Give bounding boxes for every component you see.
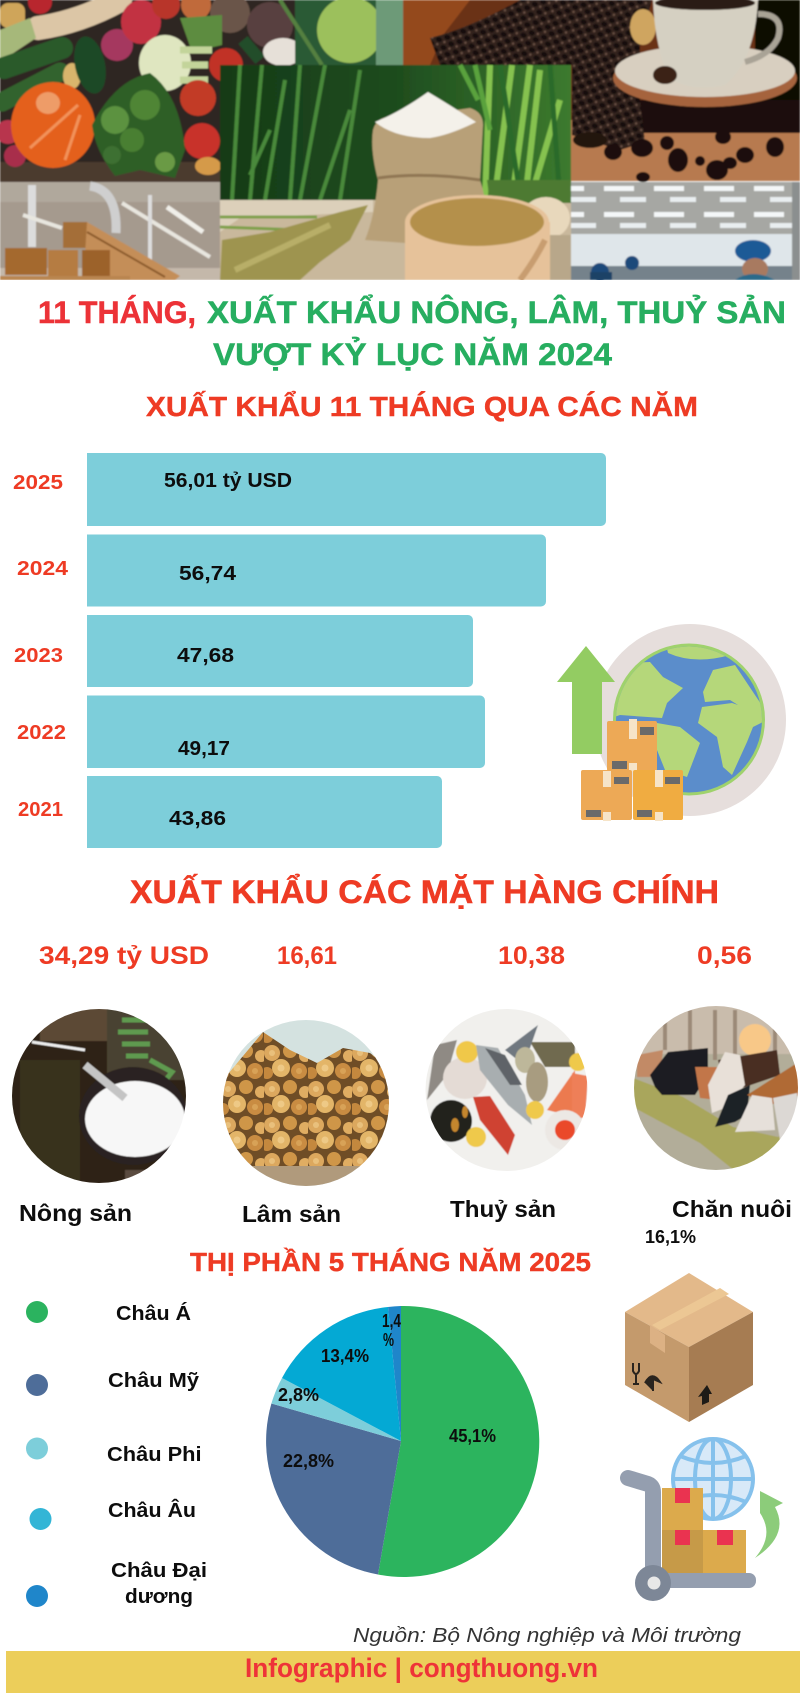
legend: Oceania: Châu Đại <box>111 1560 207 1582</box>
photo: lumber warehouse <box>0 182 220 280</box>
pie value labels: % <box>383 1330 394 1350</box>
heading: main export items: XUẤT KHẨU CÁC MẶT HÀNG CHÍNH <box>130 874 719 910</box>
bar 2025: 2025 <box>13 471 63 494</box>
slice: Africa <box>271 1378 401 1441</box>
bar 2022: 2022 <box>17 721 66 744</box>
item: agricultural products <box>10 942 209 1226</box>
bar 2025 <box>13 453 606 526</box>
item: livestock <box>632 942 800 1222</box>
footer band: Infographic | congthuong.vn <box>245 1653 598 1683</box>
title: 11 THÁNG, <box>38 294 196 330</box>
legend: Americas: Châu Mỹ <box>108 1370 200 1392</box>
hero photo collage <box>0 0 800 281</box>
stray percentage label: 16,1% <box>645 1226 696 1247</box>
label: Thuỷ sản <box>450 1196 556 1222</box>
slice: Asia <box>378 1306 539 1577</box>
icon: cardboard box <box>625 1273 753 1422</box>
bar 2024: 2024 <box>17 557 69 580</box>
label: Lâm sản <box>242 1201 341 1227</box>
wheel <box>635 1565 671 1601</box>
label: Nông sản <box>19 1200 132 1226</box>
title: VƯỢT KỶ LỤC NĂM 2024 <box>213 336 612 372</box>
icon: trolley with parcels and globe <box>628 1439 783 1601</box>
photo: garment factory <box>571 182 800 281</box>
bar 2021: 2021 <box>18 798 63 821</box>
photo: dairy cows <box>632 1002 800 1175</box>
pie value labels: 45,1% <box>449 1426 496 1446</box>
photo: seafood platter <box>423 1007 591 1175</box>
photo: log pile <box>220 1018 392 1190</box>
pie value labels: 22,8% <box>283 1451 334 1471</box>
bar 2024 <box>17 534 546 606</box>
slice: Europe <box>282 1307 401 1441</box>
legend: Asia <box>26 1301 191 1325</box>
icon: globe with arrow and parcels <box>557 624 786 821</box>
bar 2024: 56,74 <box>179 562 237 585</box>
bar chart: 11-month exports <box>13 453 606 848</box>
trolley frame <box>628 1478 653 1572</box>
legend: Africa <box>26 1438 202 1466</box>
legend: Oceania <box>26 1560 207 1608</box>
pie value labels <box>278 1311 496 1471</box>
slice: Americas <box>266 1404 401 1574</box>
legend <box>26 1301 207 1608</box>
item: forest products: 16,61 <box>277 942 337 970</box>
item: forest products <box>220 942 392 1227</box>
title: XUẤT KHẨU NÔNG, LÂM, THUỶ SẢN <box>207 294 786 330</box>
return arrow <box>755 1491 783 1558</box>
bar 2025: 56,01 tỷ USD <box>164 469 292 492</box>
item: seafood <box>423 942 591 1222</box>
photo: coffee and beans <box>403 0 800 182</box>
legend: Europe <box>30 1498 196 1530</box>
item: agricultural products: 34,29 tỷ USD <box>39 942 209 970</box>
photo: rice sack and bowl <box>220 65 571 280</box>
legend: Asia: Châu Á <box>116 1302 191 1325</box>
bar 2021: 43,86 <box>169 807 226 830</box>
legend: Africa: Châu Phi <box>107 1444 202 1466</box>
heading: market share: THỊ PHẦN 5 THÁNG NĂM 2025 <box>190 1248 591 1277</box>
pie value labels: 1,4 <box>382 1311 401 1331</box>
parcels <box>662 1488 746 1573</box>
bar 2023 <box>14 615 473 687</box>
pie value labels: 13,4% <box>321 1346 369 1366</box>
bar 2021 <box>18 776 442 848</box>
bar 2022: 49,17 <box>178 737 230 760</box>
legend: Americas <box>26 1370 200 1396</box>
bar 2022 <box>17 696 485 768</box>
item: livestock: 0,56 <box>697 942 752 970</box>
source: Nguồn: Bộ Nông nghiệp và Môi trường <box>353 1624 742 1647</box>
photo: rubber latex <box>10 1005 190 1187</box>
slice: Oceania <box>388 1306 401 1441</box>
pie value labels: 2,8% <box>278 1385 319 1405</box>
photo: vegetables <box>0 0 403 182</box>
legend: Oceania: dương <box>125 1586 193 1608</box>
heading: exports over the years: XUẤT KHẨU 11 THÁNG QUA CÁC NĂM <box>146 391 698 422</box>
bar 2023: 47,68 <box>177 644 234 667</box>
wire globe <box>673 1439 753 1519</box>
pie chart: market share <box>266 1306 539 1577</box>
footer band <box>6 1651 800 1693</box>
legend: Europe: Châu Âu <box>108 1498 196 1522</box>
label: Chăn nuôi <box>672 1196 792 1222</box>
item: seafood: 10,38 <box>498 942 565 970</box>
title <box>38 294 786 372</box>
bar 2023: 2023 <box>14 644 63 667</box>
